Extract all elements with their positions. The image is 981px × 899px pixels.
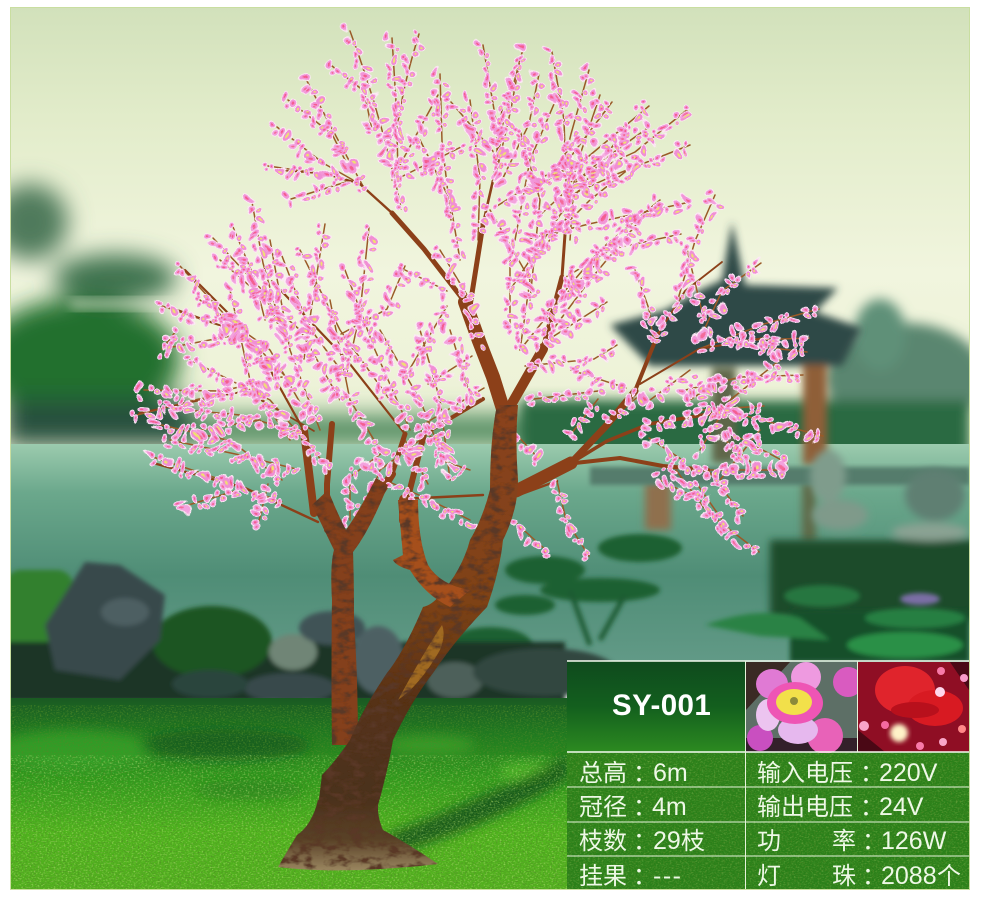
spec: fruit: --- — [653, 862, 682, 890]
spec: power: 功 — [757, 828, 781, 855]
main limbs — [139, 109, 764, 541]
lily pads — [705, 585, 969, 662]
specification panel — [567, 661, 969, 890]
bridge — [590, 467, 970, 485]
haze bar among left trees — [70, 298, 180, 310]
trunk — [278, 405, 518, 870]
lawn texture — [11, 705, 969, 889]
spec: branches — [579, 827, 705, 855]
pavilion — [610, 222, 862, 542]
sunlit bark patch — [398, 625, 444, 700]
trunk foot — [278, 795, 438, 870]
spec: height: 6m — [653, 759, 688, 787]
spec: branches: ： — [633, 828, 657, 855]
model name: SY-001 — [612, 689, 711, 722]
spec: LED beads: ： — [862, 863, 886, 890]
spec: fruit — [579, 862, 682, 890]
hedges and rocks on the left bank — [0, 562, 617, 703]
lake — [11, 444, 969, 664]
spec: power — [757, 827, 947, 855]
spec: height: ： — [633, 760, 657, 787]
model cell — [567, 661, 745, 752]
lawn sunlight and shadows — [0, 729, 571, 852]
spec: LED beads: 2088 — [881, 862, 937, 890]
garden rocks on the right bank — [770, 450, 980, 620]
spec: crown diameter: 冠径 — [579, 794, 627, 821]
thin twigs — [137, 31, 823, 556]
sky — [11, 8, 969, 448]
side limb — [393, 500, 470, 607]
shrub behind the trunk — [454, 531, 684, 648]
spec: input voltage — [757, 759, 938, 787]
spec: height: 总高 — [579, 760, 627, 787]
spec: crown diameter: 4m — [652, 793, 687, 821]
photo: lit blossom — [858, 662, 969, 752]
spec: power: ： — [862, 828, 886, 855]
spec: LED beads: 灯 — [757, 863, 781, 890]
spec: output voltage: 输出电压 — [757, 794, 853, 821]
spec: fruit: 挂果 — [579, 863, 627, 890]
spec: LED beads: 个 — [937, 863, 961, 890]
distant trees on the left — [0, 184, 610, 445]
spec: branches: 枝数 — [579, 828, 627, 855]
spec: output voltage: ： — [860, 794, 884, 821]
spec rows background — [567, 753, 969, 889]
lawn — [11, 698, 969, 889]
spec: power: 率 — [832, 828, 856, 855]
spec: power: 126W — [881, 827, 947, 855]
spec: input voltage: 输入电压 — [757, 760, 853, 787]
distant trees on the right — [520, 299, 981, 460]
spec: crown diameter — [579, 793, 687, 821]
spec: height — [579, 759, 688, 787]
table lines — [567, 661, 969, 889]
tree — [133, 29, 827, 870]
spec: input voltage: ： — [860, 760, 884, 787]
photo: daylight blossom — [746, 662, 863, 754]
spec: output voltage: 24V — [879, 793, 924, 821]
tree branches — [137, 31, 823, 556]
spec: input voltage: 220V — [879, 759, 938, 787]
spec: LED beads: 珠 — [832, 863, 856, 890]
spec: branches: 29 — [653, 827, 681, 855]
right trunk — [300, 405, 518, 835]
spec: LED beads — [757, 862, 961, 890]
spec: fruit: ： — [633, 863, 657, 890]
spec: branches: 枝 — [681, 828, 705, 855]
blossoms — [133, 29, 827, 561]
spec: crown diameter: ： — [633, 794, 657, 821]
spec: output voltage — [757, 793, 924, 821]
left trunk — [312, 478, 388, 745]
